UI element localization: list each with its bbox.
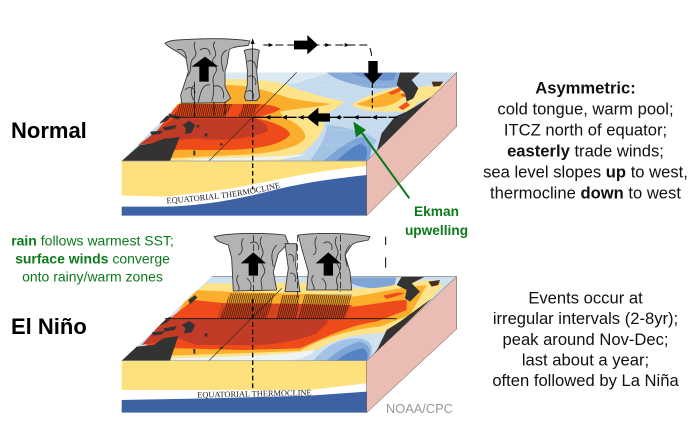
panel: normal conditions ocean block (122, 35, 457, 216)
arrows: rising air in clouds (241, 235, 341, 303)
front face cross-section, El Niño (122, 361, 367, 413)
arrows: weak descent (384, 237, 387, 268)
equatorial line and date line (175, 72, 297, 161)
cloud: central narrow tower, El Niño (285, 244, 300, 292)
thermocline label, El Niño: EQUATORIAL THERMOCLINE (197, 388, 312, 400)
text block: Asymmetric: easterly trade winds; (507, 142, 664, 160)
dashed vertical line, normal (251, 117, 255, 189)
right side face, El Niño (367, 277, 457, 413)
label: Ekman upwelling: upwelling (405, 223, 468, 238)
text block: Asymmetric: ITCZ north of equator; (504, 120, 667, 140)
text block: Asymmetric: cold tongue, warm pool; (497, 100, 674, 118)
rain hatching, El Niño (220, 293, 352, 318)
cloud: left convective tower, El Niño (214, 233, 288, 291)
front face cross-section, normal (122, 161, 367, 216)
right side face, normal (367, 72, 457, 216)
rain hatching, normal (173, 104, 259, 117)
land masses, El Niño (122, 277, 440, 361)
thermocline label, normal: EQUATORIAL THERMOCLINE (166, 182, 280, 204)
arrow: easterly trade winds (253, 108, 397, 127)
arrow: rising air in cloud (192, 57, 218, 82)
text block: Events: Events occur at (528, 288, 643, 308)
text block: rain and surface winds: rain follows warmest SST; (11, 232, 174, 248)
sea surface temperature map, El Niño (122, 277, 457, 361)
text block: Asymmetric: Asymmetric: (535, 78, 636, 98)
text block: Events: peak around Nov-Dec; (502, 330, 669, 349)
land masses, normal (122, 72, 443, 161)
cloud: large convective tower, normal (165, 39, 250, 103)
text block: Asymmetric (483, 78, 688, 202)
text block: Events: last about a year; (522, 350, 649, 370)
text block: rain and surface winds: surface winds converge (15, 250, 170, 266)
text block: Events: often followed by La Niña (492, 371, 679, 390)
label: Ekman upwelling: Ekman (414, 204, 459, 219)
arrow: Ekman upwelling pointer (353, 122, 409, 198)
arrows: upper-level walker circulation (194, 35, 383, 117)
text block: Asymmetric: sea level slopes up to west, (483, 162, 688, 182)
text block: rain and surface winds (11, 232, 174, 284)
sea surface temperature map, normal (122, 72, 457, 161)
heading: Normal: Normal (11, 118, 87, 143)
equatorial line and date line, El Niño (165, 288, 397, 361)
text block: rain and surface winds: onto rainy/warm zones (22, 268, 163, 284)
label: Ekman upwelling (405, 204, 468, 238)
text block: Events (492, 288, 679, 390)
panel: El Niño conditions ocean block (122, 233, 457, 413)
heading: El Niño: El Niño (11, 314, 87, 339)
cloud: small convective tower, normal (244, 49, 260, 101)
credit: NOAA/CPC: NOAA/CPC (386, 401, 453, 416)
back edge, El Niño (212, 276, 457, 278)
text block: Events: irregular intervals (2-8yr); (493, 309, 678, 328)
cloud: right convective tower, El Niño (298, 233, 370, 290)
text block: Asymmetric: thermocline down to west (490, 184, 681, 202)
dashed vertical line, El Niño (251, 299, 255, 391)
